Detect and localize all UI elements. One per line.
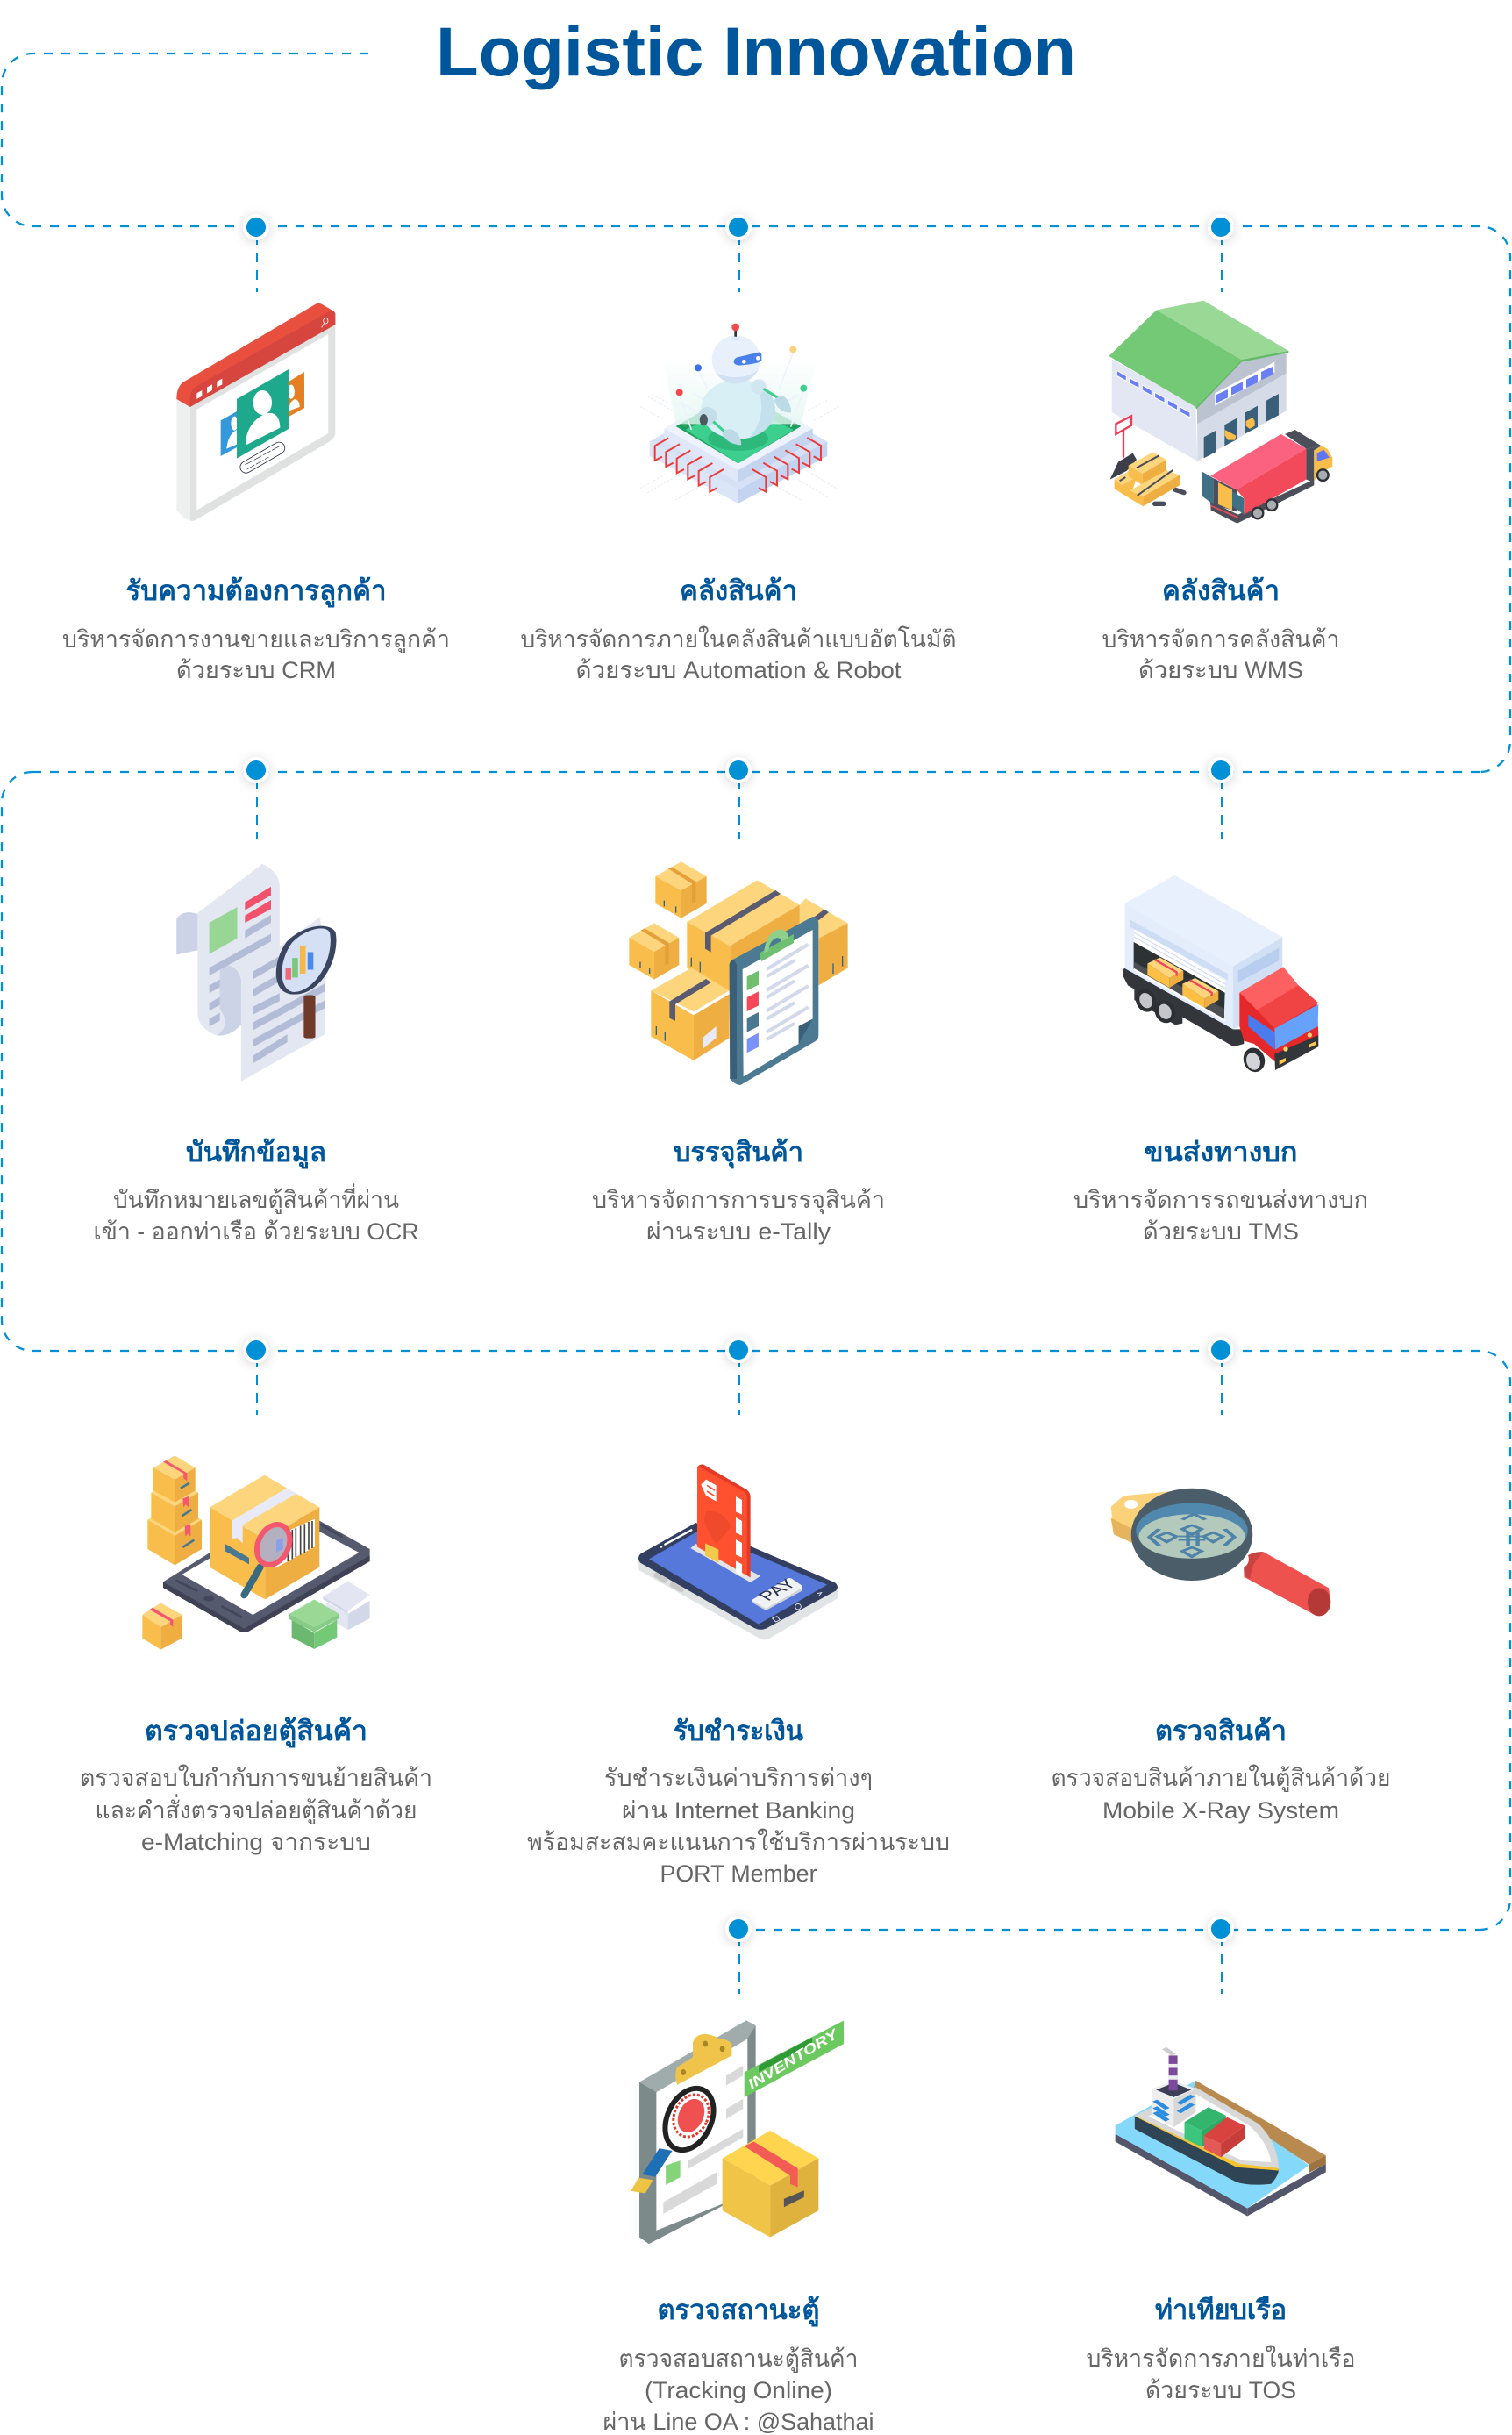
panel: container release check [80, 1455, 432, 1855]
description: บริหารจัดการรถขนส่งทางบก [1073, 1187, 1368, 1213]
description: ด้วยระบบ WMS [1138, 657, 1303, 683]
description [592, 1187, 885, 1245]
panel: container tracking [603, 2021, 874, 2435]
description: บริหารจัดการคลังสินค้า [1102, 626, 1340, 653]
description: ด้วยระบบ CRM [176, 657, 336, 683]
icon: robot on chip [640, 324, 839, 503]
vertical connectors [257, 235, 1222, 1994]
panel: warehouse automation and robot [521, 324, 956, 683]
description: ด้วยระบบ Automation & Robot [575, 657, 902, 683]
panel: payment [527, 1464, 950, 1887]
icon: box on tablet with magnifier [142, 1455, 370, 1650]
panel: packing e-Tally [592, 861, 885, 1245]
description [527, 1765, 950, 1887]
icon: boxes and clipboard [629, 861, 848, 1085]
icon: warehouse with truck and pallet [1109, 301, 1332, 524]
dashed connector path [2, 54, 1510, 1930]
description: บริหารจัดการภายในท่าเรือ [1086, 2345, 1356, 2372]
panel: warehouse WMS [1102, 301, 1340, 683]
icon: phone with credit card: PAY [754, 1576, 801, 1603]
heading: ขนส่งทางบก [1144, 1137, 1298, 1168]
heading: ท่าเทียบเรือ [1155, 2295, 1287, 2325]
description: และคำสั่งตรวจปล่อยตู้สินค้าด้วย [95, 1794, 417, 1824]
heading: บันทึกข้อมูล [186, 1137, 326, 1169]
description [1051, 1764, 1391, 1824]
description [1102, 626, 1340, 683]
heading: ตรวจปล่อยตู้สินค้า [145, 1716, 367, 1748]
panel: customer needs CRM [62, 303, 450, 683]
description: PORT Member [660, 1860, 817, 1887]
heading: คลังสินค้า [680, 575, 797, 606]
panel: cargo inspection X-Ray [1051, 1489, 1391, 1824]
icon: inventory clipboard: INVENTORY [745, 2026, 842, 2092]
timeline nodes [243, 214, 1234, 1942]
description: บริหารจัดการงานขายและบริการลูกค้า [62, 626, 450, 653]
title: Logistic Innovation [436, 12, 1076, 90]
description: ผ่าน Internet Banking [622, 1797, 855, 1824]
description: บันทึกหมายเลขตู้สินค้าที่ผ่าน [113, 1183, 399, 1214]
heading: ตรวจสินค้า [1155, 1716, 1287, 1746]
description: ผ่าน Line OA : @Sahathai [603, 2409, 874, 2435]
description: พร้อมสะสมคะแนนการใช้บริการผ่านระบบ [527, 1828, 950, 1855]
description [603, 2346, 874, 2435]
icon: scanner magnifier [1111, 1489, 1330, 1616]
description [62, 626, 450, 683]
icon: container ship at berth [1116, 2048, 1326, 2217]
description [1086, 2345, 1356, 2403]
panel: data recording OCR [93, 864, 419, 1245]
description: ตรวจสอบใบกำกับการขนย้ายสินค้า [80, 1764, 432, 1791]
description: ด้วยระบบ TMS [1143, 1218, 1299, 1245]
description: (Tracking Online) [645, 2377, 832, 2403]
panel: road transport TMS [1073, 875, 1368, 1245]
description [93, 1183, 419, 1245]
description: รับชำระเงินค่าบริการต่างๆ [604, 1765, 873, 1791]
heading: คลังสินค้า [1162, 575, 1280, 606]
description: Mobile X-Ray System [1102, 1797, 1339, 1824]
description [80, 1764, 432, 1855]
heading: ตรวจสถานะตู้ [658, 2295, 819, 2327]
heading: รับชำระเงิน [674, 1716, 803, 1746]
description: ตรวจสอบสินค้าภายในตู้สินค้าด้วย [1051, 1764, 1391, 1792]
description: บริหารจัดการการบรรจุสินค้า [592, 1187, 885, 1215]
heading: บรรจุสินค้า [674, 1137, 803, 1169]
description: เข้า - ออกท่าเรือ ด้วยระบบ OCR [93, 1218, 419, 1245]
icon: browser window with contacts [176, 303, 335, 521]
panel: port TOS [1086, 2048, 1356, 2403]
description [1073, 1187, 1368, 1245]
description: ผ่านระบบ e-Tally [646, 1218, 831, 1245]
description [521, 625, 956, 683]
icon: documents with magnifier [176, 864, 333, 1082]
icon: phone with credit card [638, 1464, 838, 1639]
description: ตรวจสอบสถานะตู้สินค้า [619, 2346, 858, 2373]
icon: inventory clipboard [638, 2021, 844, 2244]
heading: รับความต้องการลูกค้า [126, 575, 386, 608]
description: e-Matching จากระบบ [141, 1829, 371, 1855]
description: ด้วยระบบ TOS [1145, 2377, 1296, 2403]
description: บริหารจัดการภายในคลังสินค้าแบบอัตโนมัติ [521, 625, 956, 653]
icon: delivery truck [1123, 875, 1318, 1075]
